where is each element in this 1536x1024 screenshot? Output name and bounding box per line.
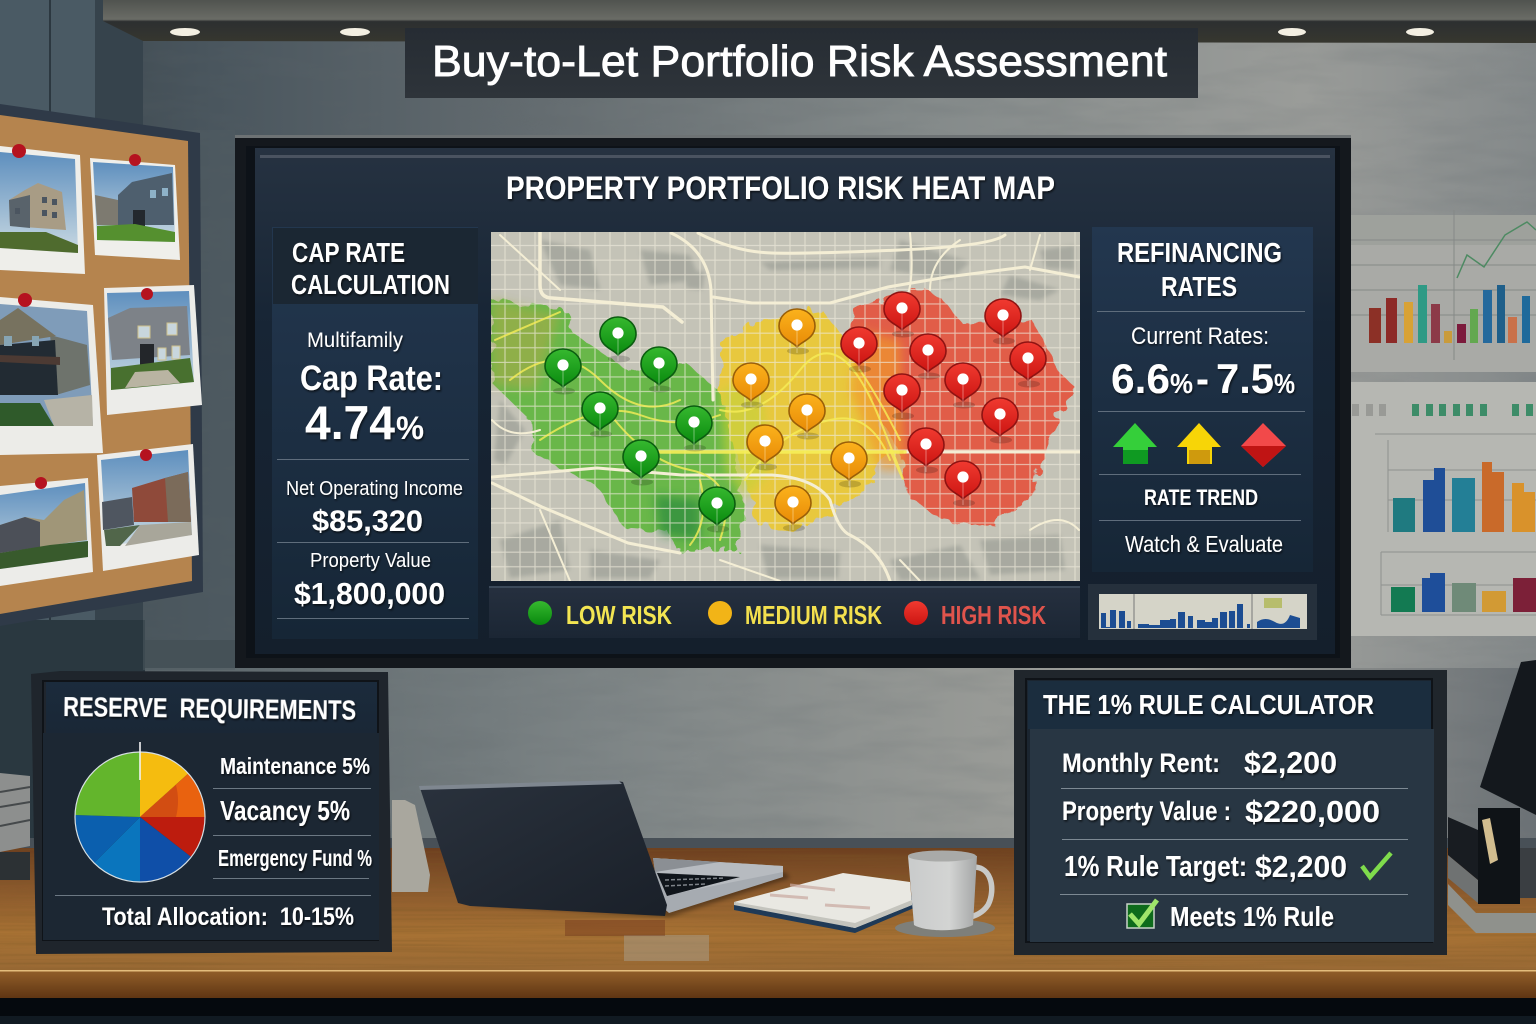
photo 6 — [97, 444, 199, 571]
net operating income — [286, 478, 463, 538]
reserve items: Maintenance 5% — [220, 753, 370, 779]
photo 4 — [104, 285, 202, 415]
panel: the 1% rule calculator — [1014, 670, 1447, 955]
current rates: 6.6 — [1111, 355, 1170, 402]
reserve items: Vacancy 5% — [220, 795, 350, 826]
watch and evaluate label: Watch & Evaluate — [1125, 531, 1283, 557]
ceiling with spotlights — [103, 0, 1536, 43]
desk items left: paper stack and stapler — [0, 773, 430, 892]
multifamily cap rate value — [300, 329, 443, 449]
net operating income: Net Operating Income — [286, 478, 463, 500]
1% rule target row: 1% Rule Target: — [1064, 851, 1247, 883]
title plate — [405, 28, 1198, 98]
photo 3 — [0, 297, 103, 455]
multifamily cap rate value: Multifamily — [307, 329, 403, 352]
cap rate heading — [291, 237, 450, 300]
multifamily cap rate value: Cap Rate: — [300, 359, 443, 398]
pie chart — [75, 742, 205, 882]
legend bar — [489, 586, 1080, 638]
wall charts: lower right paper — [1350, 382, 1536, 636]
legend: high risk — [904, 600, 1046, 630]
current rates: - — [1196, 355, 1209, 402]
rate trend label: RATE TREND — [1144, 485, 1258, 510]
monthly rent row — [1062, 745, 1337, 780]
property value — [294, 550, 445, 611]
net operating income: $85,320 — [312, 505, 423, 538]
legend: low risk: LOW RISK — [566, 600, 672, 630]
coffee mug and saucer — [895, 850, 995, 937]
desk items right: monitor and books — [1448, 660, 1536, 933]
legend: high risk: HIGH RISK — [941, 600, 1046, 630]
current rates — [1111, 323, 1295, 402]
icon: green up arrow — [1113, 423, 1157, 464]
legend: medium risk — [708, 600, 882, 630]
photo 5 — [0, 478, 93, 586]
roads — [492, 232, 1080, 581]
meets rule label: Meets 1% Rule — [1170, 901, 1334, 932]
icon: yellow up arrow — [1177, 423, 1221, 464]
title text: Buy-to-Let Portfolio Risk Assessment — [432, 37, 1167, 86]
pins: medium risk — [733, 309, 867, 532]
current rates: 7.5 — [1216, 355, 1274, 402]
property value row — [1062, 794, 1380, 829]
total allocation: Total Allocation: 10-15% — [102, 903, 354, 931]
cap rate heading: CAP RATE — [292, 237, 405, 268]
property value row: $220,000 — [1245, 794, 1380, 829]
photo 1 — [0, 146, 85, 274]
current rates: % — [1170, 368, 1193, 399]
property value row: Property Value : — [1062, 796, 1231, 826]
icon: red diamond — [1241, 423, 1286, 467]
icon: green check — [1362, 853, 1391, 877]
pins: high risk — [841, 292, 1046, 506]
notebook — [734, 873, 914, 933]
heat map heading: PROPERTY PORTFOLIO RISK HEAT MAP — [506, 170, 1055, 206]
reserve items: Emergency Fund % — [218, 845, 372, 871]
thumbnail mini charts — [1088, 584, 1317, 640]
low risk zone — [492, 300, 745, 550]
panel: refinancing rates — [1092, 227, 1313, 572]
refinancing heading — [1117, 237, 1282, 302]
laptop — [419, 780, 790, 917]
refinancing heading: REFINANCING — [1117, 237, 1282, 268]
1% rule target row: $2,200 — [1255, 849, 1347, 884]
calculator heading: THE 1% RULE CALCULATOR — [1043, 689, 1374, 720]
panel: cap rate calculation — [272, 227, 478, 639]
property value: $1,800,000 — [294, 576, 445, 611]
multifamily cap rate value: % — [396, 410, 424, 446]
icon: checked box — [1127, 900, 1157, 928]
reserve heading: RESERVE REQUIREMENTS — [63, 691, 356, 726]
high risk zone — [850, 287, 1075, 527]
photo 2 — [90, 158, 180, 260]
legend: medium risk: MEDIUM RISK — [745, 600, 882, 630]
property value: Property Value — [310, 550, 431, 572]
reserve items — [218, 753, 372, 871]
cork notice board with property photos — [0, 104, 203, 626]
wall charts: upper right paper — [1350, 210, 1536, 372]
monthly rent row: $2,200 — [1244, 745, 1337, 780]
pins: low risk — [545, 317, 735, 532]
monthly rent row: Monthly Rent: — [1062, 748, 1220, 778]
legend: low risk — [528, 600, 672, 630]
cap rate heading: CALCULATION — [291, 269, 450, 300]
refinancing heading: RATES — [1161, 271, 1237, 302]
panel: reserve requirements — [31, 671, 392, 954]
heat map — [491, 232, 1080, 581]
red pins — [12, 144, 153, 489]
current rates: % — [1274, 368, 1295, 399]
medium risk zone — [721, 310, 888, 533]
multifamily cap rate value: 4.74 — [305, 396, 395, 449]
main display monitor — [235, 135, 1351, 668]
wooden desk — [0, 838, 1536, 1024]
current rates: Current Rates: — [1131, 323, 1269, 350]
